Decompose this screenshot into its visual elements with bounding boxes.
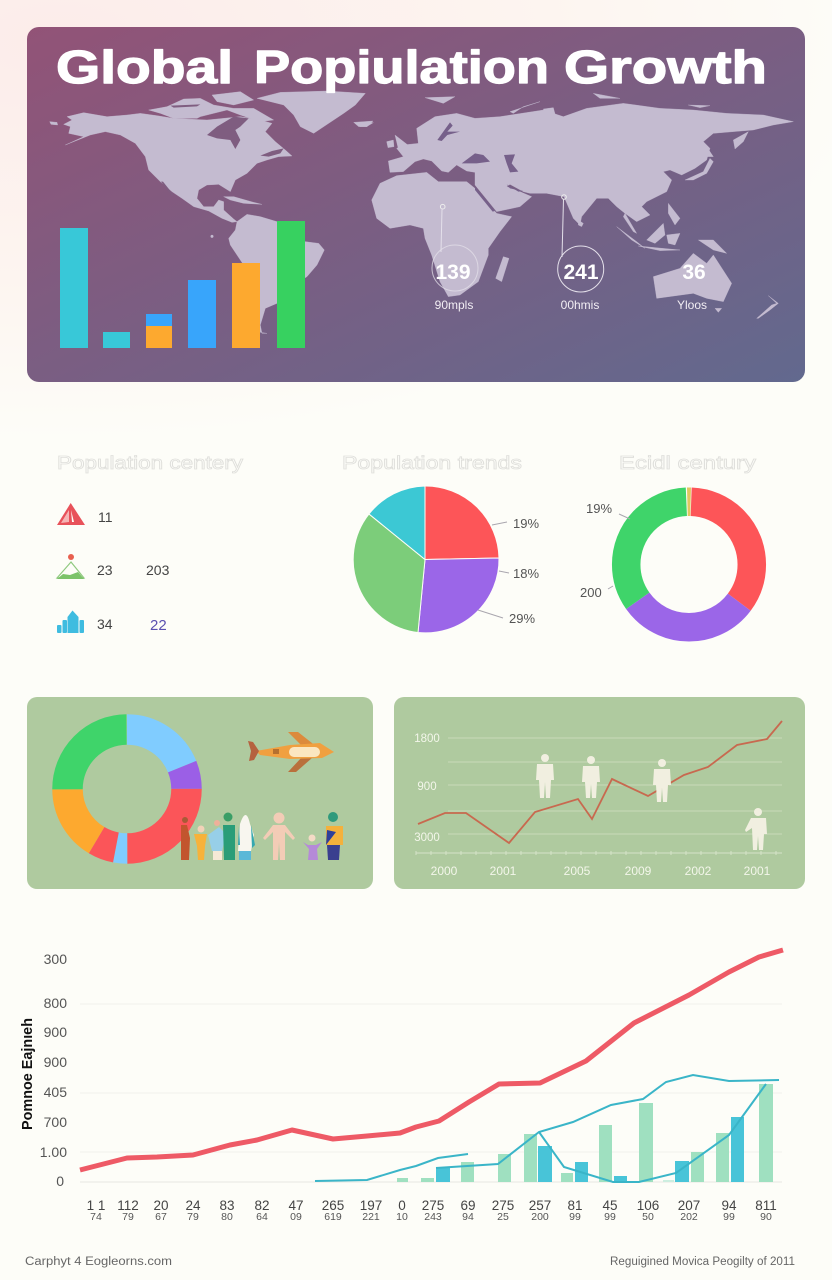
x labels: 2009: [625, 864, 652, 878]
title: Growth: [564, 41, 767, 93]
y axis title: Pomnoe Eajnıeh: [19, 1018, 36, 1130]
person 5: [238, 815, 255, 860]
x labels top row: 1 1: [87, 1198, 105, 1213]
figure 3: [653, 759, 671, 802]
x labels top row: 265: [322, 1198, 344, 1213]
stat: 23 and 203: [97, 562, 170, 578]
stat: 34 and 22: [97, 616, 167, 634]
callout: 139: 90mpls: [435, 298, 473, 312]
y labels: 900: [417, 781, 437, 793]
world map: eurasia, africa, oceania: [360, 93, 793, 318]
x labels top row: 24: [185, 1198, 201, 1213]
title: Popiulation: [254, 41, 549, 93]
heading: ecidl century: Ecidl century: [619, 453, 756, 473]
x labels top row: 81: [567, 1198, 583, 1213]
x labels bottom row: 94: [462, 1211, 474, 1223]
x labels top row: 83: [219, 1198, 235, 1213]
x labels top row: 82: [254, 1198, 270, 1213]
title: Global: [56, 41, 233, 93]
title: [56, 41, 767, 93]
person 7: [303, 834, 322, 860]
chart: bottom combined chart: [19, 950, 783, 1223]
stat: 34 and 22: 22: [150, 617, 167, 634]
y axis labels: 900: [44, 1024, 67, 1040]
icon: airplane: [248, 732, 334, 772]
labels: donut: 200: [580, 585, 602, 600]
labels: pie: 19%: [513, 516, 539, 531]
x labels bottom row: 79: [122, 1211, 134, 1223]
x labels bottom row: 90: [760, 1211, 772, 1223]
y axis labels: 405: [44, 1084, 67, 1100]
x labels top row: 47: [288, 1198, 304, 1213]
callout: 241: 241: [563, 261, 599, 284]
icon: mountain with pin: [57, 554, 84, 579]
panel: hero map: [27, 27, 805, 382]
person 4: [223, 812, 235, 860]
y axis labels: 300: [44, 951, 67, 967]
x labels: 2000: [431, 864, 458, 878]
labels: pie: [478, 516, 539, 626]
stat: 11: 11: [98, 509, 113, 525]
stat: 34 and 22: 34: [97, 616, 113, 632]
x labels bottom row: 99: [604, 1211, 616, 1223]
icon: sail: [57, 503, 85, 525]
callout: 36: [677, 261, 707, 312]
x labels top row: 45: [602, 1198, 618, 1213]
labels: pie: 29%: [509, 611, 535, 626]
x labels top row: 811: [755, 1198, 777, 1213]
figures: [536, 754, 767, 850]
x labels bottom row: 67: [155, 1211, 167, 1223]
x labels bottom row: 10: [396, 1211, 408, 1223]
x labels bottom row: 25: [497, 1211, 509, 1223]
bar chart: hero bars: [60, 221, 305, 348]
x labels bottom row: 99: [569, 1211, 581, 1223]
callout: 139: 139: [435, 261, 471, 284]
person 6: [263, 812, 295, 860]
labels: donut: [580, 501, 630, 600]
red line: [80, 950, 783, 1170]
world map: americas: [50, 91, 373, 333]
x labels: 2001: [490, 864, 517, 878]
stat: 23 and 203: 23: [97, 562, 113, 578]
teal bars: [436, 1117, 744, 1182]
trend line: [418, 721, 782, 843]
x labels top row: 69: [460, 1198, 476, 1213]
x labels: 2005: [564, 864, 591, 878]
footer: right: Reguigined Movica Peogilty of 2011: [610, 1256, 795, 1268]
x labels top row: 20: [153, 1198, 169, 1213]
person 2: [194, 826, 207, 860]
x labels: 2002: [685, 864, 712, 878]
x labels bottom row: 64: [256, 1211, 268, 1223]
x labels bottom row: 79: [187, 1211, 199, 1223]
y labels: 3000: [414, 832, 440, 844]
x labels bottom row: 80: [221, 1211, 233, 1223]
x labels top row: 257: [529, 1198, 551, 1213]
x labels bottom row: 09: [290, 1211, 302, 1223]
callout: 241: 00hmis: [561, 298, 599, 312]
y axis labels: 1.00: [40, 1144, 67, 1160]
panel: donut and people: [27, 697, 373, 889]
y labels: [414, 733, 440, 844]
y axis labels: 800: [44, 995, 67, 1011]
labels: pie: 18%: [513, 566, 539, 581]
chart: donut: [625, 500, 753, 629]
teal lines: [315, 1075, 779, 1182]
callout: 36: Yloos: [677, 298, 707, 312]
panel: line chart with figures: [394, 697, 805, 889]
person 3: [208, 820, 226, 860]
callout: 36: 36: [682, 261, 706, 284]
axis: [416, 851, 782, 855]
x labels top row: 197: [360, 1198, 382, 1213]
person 1: [181, 817, 190, 860]
x labels bottom row: 50: [642, 1211, 654, 1223]
callout: 241: [558, 195, 604, 312]
x labels bottom row: 74: [90, 1211, 102, 1223]
x labels top row: [87, 1198, 777, 1213]
y axis labels: 700: [44, 1114, 67, 1130]
chart: green panel donut: [68, 730, 186, 848]
figure 2: [582, 756, 600, 798]
callout: 139: [432, 204, 478, 312]
x labels bottom row: 99: [723, 1211, 735, 1223]
x labels bottom row: [90, 1211, 772, 1223]
y labels: 1800: [414, 733, 440, 745]
figure 4: [745, 808, 767, 850]
x labels bottom row: 619: [324, 1211, 342, 1223]
icon: buildings: [57, 610, 84, 633]
x labels top row: 275: [422, 1198, 444, 1213]
footer: left: Carphyt 4 Eogleorns.com: [25, 1256, 172, 1268]
panel: stat list: [57, 503, 170, 634]
figure 1: [536, 754, 554, 798]
y axis labels: 0: [56, 1173, 64, 1189]
x labels bottom row: 243: [424, 1211, 442, 1223]
heading: population trends: Population trends: [342, 453, 522, 473]
x labels: [431, 864, 771, 878]
x labels top row: 112: [117, 1198, 139, 1213]
x labels top row: 207: [678, 1198, 700, 1213]
green bars: [397, 1084, 773, 1182]
people group: [181, 812, 343, 860]
x labels bottom row: 202: [680, 1211, 698, 1223]
x labels top row: 106: [637, 1198, 659, 1213]
x labels: 2001: [744, 864, 771, 878]
x labels top row: 0: [398, 1198, 406, 1213]
x labels top row: 275: [492, 1198, 514, 1213]
person 8: [326, 812, 343, 860]
x labels top row: 94: [721, 1198, 737, 1213]
stat: 23 and 203: 203: [146, 562, 170, 578]
x labels bottom row: 221: [362, 1211, 380, 1223]
y axis labels: 900: [44, 1054, 67, 1070]
labels: donut: 19%: [586, 501, 612, 516]
heading: population centery: Population centery: [57, 453, 243, 473]
x labels bottom row: 200: [531, 1211, 549, 1223]
axis line: [80, 1181, 782, 1183]
chart: pie: [353, 486, 499, 633]
y axis labels: [40, 951, 67, 1189]
